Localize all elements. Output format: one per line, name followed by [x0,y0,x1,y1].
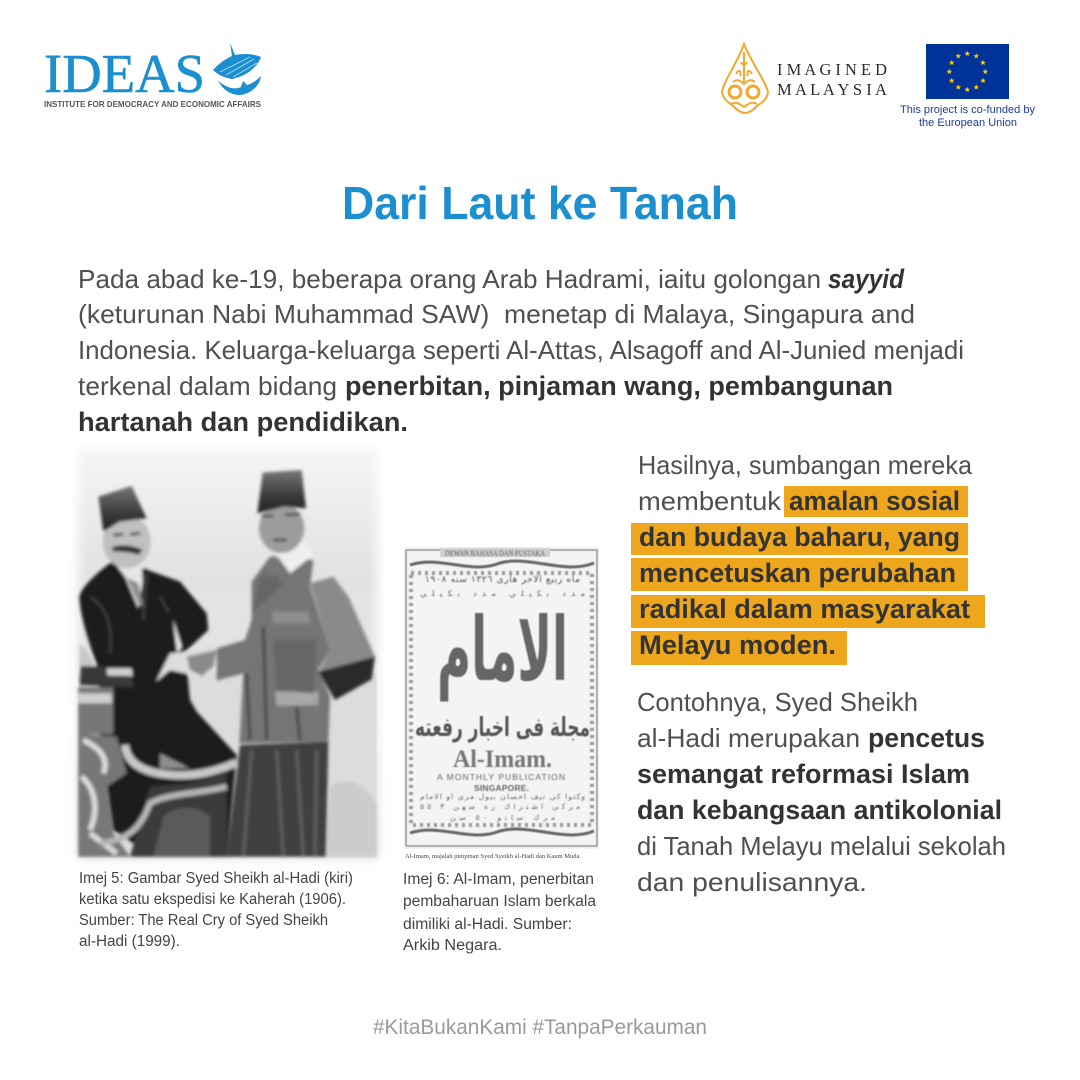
Arabic masthead lines: ماه ربيع الاخر هارى ١٣٢٦ سنه ١٩٠٨ [425,575,580,585]
example paragraph: al-Hadi merupakan [637,723,860,753]
photo: Syed Sheikh al-Hadi and companion [78,450,377,857]
logo: Imagined Malaysia: I M A G I N E D [777,60,887,79]
caption: image 6 [403,871,596,954]
caption: image 5: ketika satu ekspedisi ke Kaherah (1906). [79,891,346,908]
left man's dark suit [79,562,237,857]
logo: Imagined Malaysia [722,44,887,113]
intro paragraph: (keturunan Nabi Muhammad SAW) menetap di Malaya, Singapura and [78,299,915,329]
logo: IDEAS: INSTITUTE FOR DEMOCRACY AND ECONOMIC AFFAIRS [44,99,261,109]
example paragraph: semangat reformasi Islam [637,759,970,789]
hands and cuffs [156,646,217,682]
title: Dari Laut ke Tanah [342,177,738,229]
photo: Al-Imam magazine cover: مركى اشتراك ره سهن ٣ ٥٥ [420,802,580,811]
intro paragraph: Indonesia. Keluarga-keluarga seperti Al-Attas, Alsagoff and Al-Junied menjadi [78,335,964,365]
logo: European Union flag: the European Union [919,117,1017,129]
logo: Imagined Malaysia: M A L A Y S I A [777,80,887,99]
example paragraph: di Tanah Melayu melalui sekolah [637,831,1006,861]
Arabic subtitle: مجلة فى اخبار رفعته [415,713,590,743]
caption: image 6: Imej 6: Al-Imam, penerbitan [403,871,594,888]
caption: image 6: Arkib Negara. [403,937,502,954]
highlighted result text: dan budaya baharu, yang [639,522,960,552]
photo: Al-Imam magazine cover: مدد بكيلي مدد بكيلي [420,589,585,598]
highlighted result text: amalan sosial [789,486,960,516]
photo: Al-Imam magazine cover: مرك سانو ٥٠ سن [450,813,555,822]
caption: image 5: Sumber: The Real Cry of Syed Sheikh [79,912,328,929]
photo: Al-Imam magazine cover: DEWAN BAHASA DAN PUSTAKA [445,549,545,558]
intro paragraph: hartanah dan pendidikan. [78,407,408,437]
icon: wayang ornament [722,44,768,113]
example paragraph: dan kebangsaan antikolonial [637,795,1002,825]
example paragraph: dan penulisannya. [637,867,867,897]
example paragraph [637,687,1006,897]
caption: image 6: pembaharuan Islam berkala [403,893,596,910]
highlighted result text [631,450,985,665]
intro paragraph: sayyid [828,264,905,294]
large Arabic title: الامام [437,598,568,702]
icon: IDEAS dove [213,43,261,95]
intro paragraph: Pada abad ke-19, beberapa orang Arab Hadrami, iaitu golongan [78,264,821,294]
logo: IDEAS: IDEAS [44,43,205,104]
highlighted result text: Melayu moden. [639,630,836,660]
left man's head [103,515,151,568]
right man's jacket [217,557,330,743]
highlighted result text: radikal dalam masyarakat [639,594,970,624]
intro paragraph [78,264,964,437]
hashtags: #KitaBukanKami #TanpaPerkauman [373,1016,707,1039]
caption: image 6: dimiliki al-Hadi. Sumber: [403,916,572,933]
photo: Al-Imam magazine cover: وكتوا كى تيف احسان بيول مرى او الامام [420,792,585,801]
logo: IDEAS [44,43,261,109]
caption: image 5: al-Hadi (1999). [79,933,180,950]
photo: Al-Imam magazine cover [404,547,599,860]
intro paragraph: penerbitan, pinjaman wang, pembangunan [345,371,893,401]
highlighted result text: membentuk [638,486,782,516]
icon: ring of stars [946,51,988,92]
photo: Al-Imam magazine cover: SINGAPORE. [474,783,529,793]
caption: image 5: Imej 5: Gambar Syed Sheikh al-Hadi (kiri) [79,870,353,887]
caption: image 5 [79,870,353,950]
logo: European Union flag: This project is co-funded by [900,104,1036,116]
intro paragraph: terkenal dalam bidang [78,371,337,401]
right man's trousers [227,742,328,857]
carved table [80,666,133,687]
example paragraph: pencetus [868,723,985,753]
highlighted result text: mencetuskan perubahan [639,558,956,588]
logo: European Union flag [900,44,1036,129]
example paragraph: Contohnya, Syed Sheikh [637,687,918,717]
backdrop mottling [327,781,377,857]
photo: Al-Imam magazine cover: Al-Imam, majalah pimpinan Syed Syeikh al-Hadi dan Kaum Muda. [405,853,581,860]
English masthead: Al-Imam. [453,746,552,773]
left man's collar and tie [112,559,143,608]
photo: Al-Imam magazine cover: A MONTHLY PUBLICATION [437,772,565,782]
right man's head [259,504,304,553]
ornamental border [406,550,597,846]
highlighted result text: Hasilnya, sumbangan mereka [638,450,973,480]
